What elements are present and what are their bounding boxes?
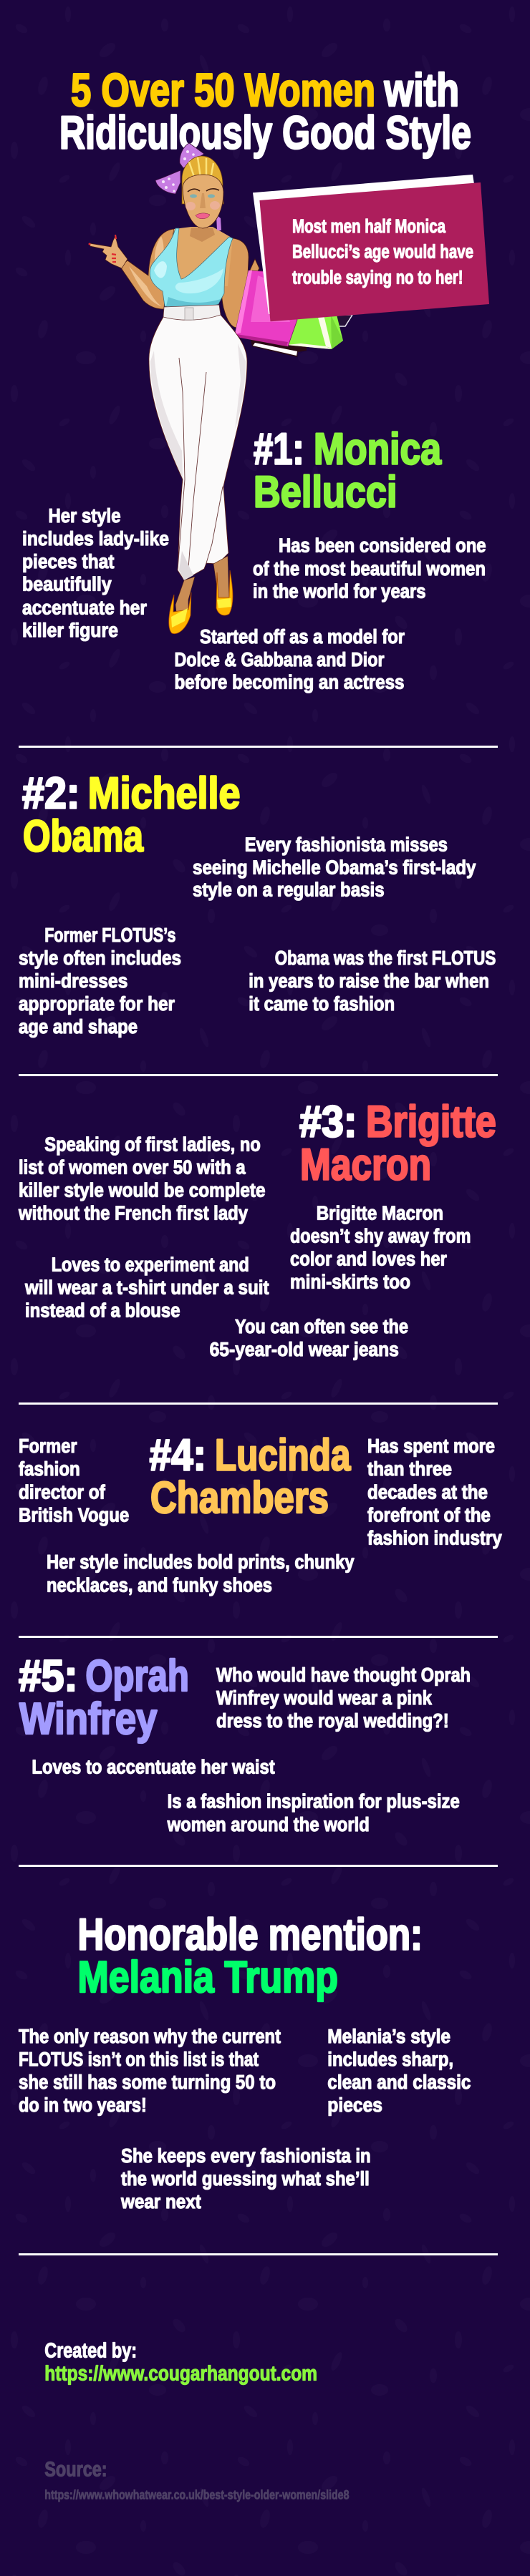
- heading: honorable mention: Melania Trump: [77, 1953, 338, 2002]
- panel: #5 Oprah Winfrey: [19, 1652, 471, 1835]
- text block: only reason: FLOTUS isn’t on this list is that: [19, 2048, 259, 2070]
- heading: Michelle Obama: [22, 769, 241, 861]
- icon: hair bow: [155, 143, 221, 230]
- title: with: [384, 64, 459, 116]
- heading: Michelle Obama: Obama: [23, 811, 143, 861]
- text block: guessing: the world guessing what she’ll: [121, 2167, 370, 2190]
- callout text: trouble saying no to her!: [292, 267, 463, 288]
- text block: three decades: Has spent more: [367, 1435, 495, 1457]
- heading: Lucinda Chambers: #4:: [150, 1431, 206, 1480]
- title: [59, 64, 471, 158]
- text block: bold prints: necklaces, and funky shoes: [47, 1574, 272, 1596]
- text block: color: mini-skirts too: [290, 1270, 410, 1292]
- text block: royal wedding: Winfrey would wear a pink: [216, 1687, 433, 1709]
- heading: Brigitte Macron: Macron: [300, 1141, 431, 1190]
- text block: three decades: decades at the: [367, 1481, 488, 1503]
- text block: most beautiful: Has been considered one: [279, 535, 486, 557]
- text block: model: before becoming an actress: [175, 671, 404, 693]
- text block: color: Brigitte Macron: [317, 1201, 443, 1224]
- text block: style: killer figure: [22, 619, 118, 641]
- text block: only reason: The only reason why the current: [19, 2025, 281, 2047]
- credit: created by: https://www.cougarhangout.com: [44, 2363, 317, 2386]
- text block: guessing: [120, 2145, 371, 2212]
- illustration: woman with shopping bags: [89, 143, 352, 634]
- text block: former director: Former: [19, 1435, 77, 1457]
- heading: Monica Bellucci: Monica: [314, 425, 441, 474]
- text block: misses: style on a regular basis: [193, 879, 385, 901]
- text block: former director: director of: [19, 1481, 106, 1503]
- heading: Monica Bellucci: Bellucci: [254, 468, 397, 517]
- text block: three decades: forefront of the: [367, 1503, 491, 1526]
- text block: jeans: 65-year-old wear jeans: [210, 1338, 399, 1360]
- text block: style: [22, 504, 169, 641]
- text block: first ladies: Speaking of first ladies, no: [44, 1133, 261, 1155]
- text block: waist: Loves to accentuate her waist: [32, 1756, 275, 1778]
- text block: three decades: than three: [367, 1458, 452, 1480]
- text block: style: beautifully: [22, 573, 112, 595]
- text block: most beautiful: [253, 535, 486, 602]
- text block: guessing: She keeps every fashionista in: [121, 2145, 371, 2167]
- icon: shopping bags: [235, 270, 352, 357]
- text block: style: includes lady-like: [22, 527, 169, 550]
- text block: former director: fashion: [19, 1458, 80, 1480]
- text block: former director: [19, 1435, 129, 1526]
- text block: only reason: she still has some turning 50 to: [19, 2071, 276, 2093]
- text block: misses: [193, 833, 476, 901]
- text block: style: accentuate her: [22, 596, 147, 618]
- text block: first ladies: list of women over 50 with a: [19, 1156, 246, 1178]
- panel: #1 Monica Bellucci: [22, 425, 486, 693]
- text block: Melania's style: clean and classic: [327, 2071, 471, 2093]
- heading: honorable mention: [77, 1910, 423, 2002]
- heading: Oprah Winfrey: [19, 1652, 189, 1744]
- text block: former director: British Vogue: [19, 1503, 129, 1526]
- icon: torso and top: [150, 227, 233, 308]
- panel: honorable mention Melania Trump: [19, 1910, 471, 2212]
- text block: mini-dresses: appropriate for her: [19, 992, 175, 1015]
- text block: guessing: wear next: [120, 2190, 201, 2212]
- text block: jeans: [210, 1315, 408, 1360]
- text block: most beautiful: of the most beautiful women: [253, 557, 486, 580]
- panel: #3 Brigitte Macron: [18, 1098, 496, 1360]
- text block: Melania's style: includes sharp,: [327, 2048, 453, 2070]
- text block: raise the bar: [249, 947, 496, 1015]
- callout: [253, 175, 489, 321]
- text block: mini-dresses: age and shape: [19, 1015, 138, 1038]
- text block: jeans: You can often see the: [235, 1315, 408, 1337]
- text block: experiment: instead of a blouse: [25, 1299, 180, 1321]
- text block: color: doesn’t shy away from: [290, 1224, 471, 1246]
- text block: experiment: will wear a t-shirt under a suit: [24, 1276, 269, 1298]
- text block: misses: seeing Michelle Obama’s first-lady: [193, 856, 476, 878]
- credit: created by: [44, 2339, 317, 2386]
- icon: trousers: [149, 315, 247, 580]
- text block: plus-size: women around the world: [167, 1813, 370, 1835]
- text block: color: color and loves her: [290, 1247, 447, 1269]
- heading: Michelle Obama: #2:: [22, 769, 80, 818]
- text block: royal wedding: Who would have thought Oprah: [216, 1664, 471, 1686]
- text block: first ladies: [18, 1133, 265, 1224]
- source: [44, 2458, 350, 2502]
- text block: model: Started off as a model for: [200, 625, 405, 648]
- text block: three decades: fashion industry: [367, 1527, 502, 1549]
- text block: royal wedding: [216, 1664, 471, 1732]
- callout text: [292, 215, 473, 288]
- heading: Lucinda Chambers: Lucinda: [215, 1431, 351, 1480]
- heading: Oprah Winfrey: #5:: [19, 1652, 77, 1701]
- text block: first ladies: killer style would be complete: [19, 1179, 265, 1201]
- text block: only reason: [19, 2025, 281, 2116]
- text block: mini-dresses: [19, 924, 181, 1038]
- source: Source:: [44, 2458, 107, 2481]
- text block: only reason: do in two years!: [19, 2094, 147, 2116]
- text block: raise the bar: in years to raise the bar when: [249, 970, 489, 992]
- text block: first ladies: without the French first lady: [18, 1201, 249, 1224]
- callout text: Bellucci’s age would have: [292, 241, 473, 263]
- heading: Oprah Winfrey: Winfrey: [19, 1694, 158, 1744]
- text block: style: Her style: [49, 504, 120, 527]
- text block: model: Dolce & Gabbana and Dior: [175, 648, 385, 670]
- text block: Melania's style: Melania’s style: [327, 2025, 450, 2047]
- heading: Lucinda Chambers: Chambers: [150, 1473, 329, 1523]
- text block: mini-dresses: style often includes: [19, 947, 181, 969]
- heading: Michelle Obama: Michelle: [88, 769, 241, 818]
- text block: three decades: [367, 1435, 502, 1549]
- heading: Monica Bellucci: #1:: [254, 425, 304, 474]
- text block: model: [175, 625, 405, 693]
- icon: head and hair: [182, 156, 223, 228]
- icon: legs and yellow shoes: [169, 556, 233, 634]
- text block: bold prints: Her style includes bold prints, chunky: [47, 1551, 355, 1573]
- heading: Brigitte Macron: [299, 1098, 496, 1190]
- text block: mini-dresses: Former FLOTUS’s: [44, 924, 175, 946]
- text block: color: [290, 1201, 471, 1292]
- text block: experiment: [24, 1253, 269, 1321]
- text block: Melania's style: pieces: [327, 2094, 382, 2116]
- heading: honorable mention: Honorable mention:: [77, 1910, 423, 1959]
- text block: most beautiful: in the world for years: [253, 580, 426, 602]
- text block: misses: Every fashionista misses: [245, 833, 448, 855]
- text block: mini-dresses: mini-dresses: [19, 970, 127, 992]
- text block: plus-size: Is a fashion inspiration for plus-size: [168, 1790, 460, 1813]
- callout text: Most men half Monica: [292, 215, 445, 237]
- text block: Melania's style: [327, 2025, 471, 2116]
- heading: Monica Bellucci: [254, 425, 441, 517]
- source: https://www.whowhatwear.co.uk/best-style-older-women/slide8: [44, 2488, 350, 2502]
- panel: #2 Michelle Obama: [19, 769, 496, 1038]
- credit: created by: Created by:: [44, 2339, 137, 2362]
- text block: raise the bar: it came to fashion: [249, 992, 395, 1015]
- text block: experiment: Loves to experiment and: [52, 1253, 249, 1275]
- icon: right arm: [221, 238, 259, 328]
- heading: Brigitte Macron: Brigitte: [366, 1098, 496, 1147]
- heading: Oprah Winfrey: Oprah: [85, 1652, 189, 1701]
- title: 5 Over 50 Women: [71, 64, 375, 116]
- text block: plus-size: [167, 1790, 460, 1835]
- icon: pointing arm and hand: [89, 229, 174, 309]
- heading: Brigitte Macron: #3:: [299, 1098, 357, 1147]
- heading: Lucinda Chambers: [150, 1431, 351, 1523]
- text block: bold prints: [47, 1551, 355, 1596]
- icon: white belt: [163, 305, 221, 320]
- text block: style: pieces that: [22, 550, 115, 572]
- panel: #4 Lucinda Chambers: [19, 1431, 502, 1596]
- text block: royal wedding: dress to the royal wedding?!: [216, 1709, 449, 1732]
